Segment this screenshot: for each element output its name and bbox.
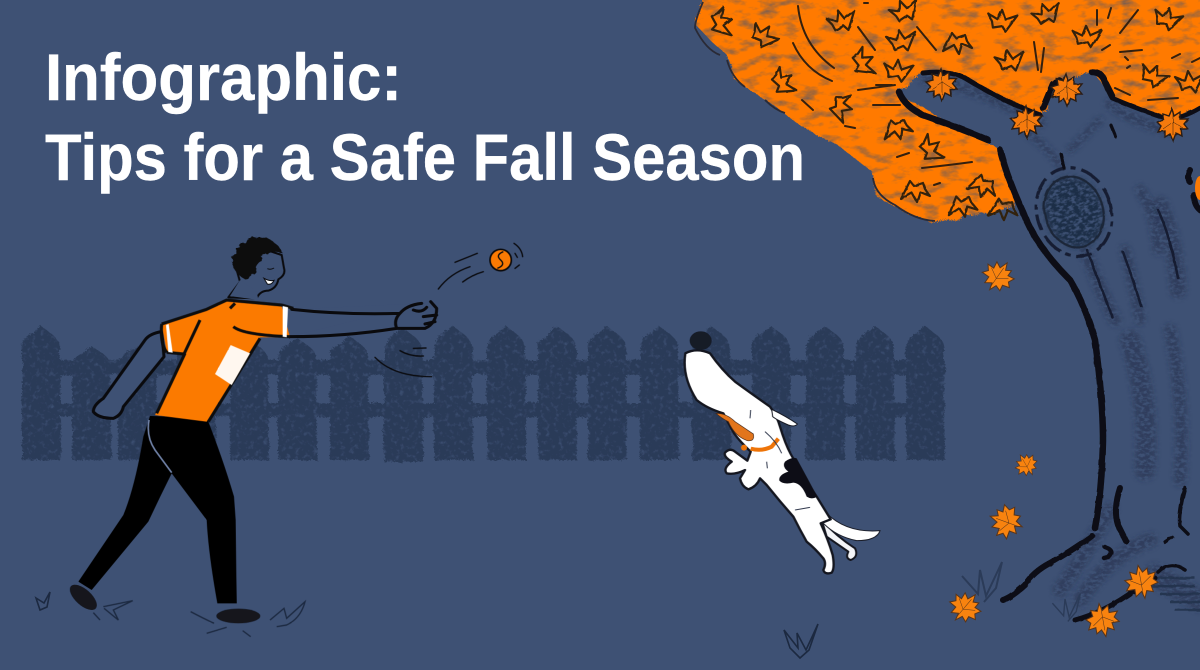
motion lines [375, 243, 523, 377]
hanging leaves on branches [926, 69, 1188, 141]
dog tail [823, 513, 880, 541]
leaf 2 [1011, 449, 1042, 480]
hair [232, 237, 283, 280]
pants [78, 416, 237, 603]
man throwing ball [66, 237, 523, 637]
leaf 6 [1084, 601, 1121, 639]
upper ear [772, 409, 797, 426]
leaf 5 [1123, 563, 1160, 601]
dog details [750, 410, 810, 510]
back leg [822, 520, 856, 560]
dog body [685, 350, 834, 573]
mouth lobe [716, 413, 754, 441]
sleeve cuffs [166, 306, 288, 353]
title [45, 40, 805, 194]
knot [1025, 158, 1123, 266]
pocket [215, 345, 250, 385]
dog collar [741, 439, 778, 451]
title: Tips for a Safe Fall Season [45, 120, 805, 194]
tennis ball [490, 249, 511, 271]
canopy leaf marks [709, 0, 1200, 221]
grass tufts [36, 562, 1080, 658]
head and neck [228, 237, 284, 300]
extended arm [290, 302, 437, 337]
title: Infographic: [45, 40, 402, 114]
shoes [66, 580, 260, 623]
shirt [155, 300, 293, 422]
leaf 4 [943, 585, 988, 630]
nose [690, 331, 712, 350]
back arm [93, 332, 164, 418]
falling maple leaves [943, 254, 1160, 639]
smile [264, 278, 274, 284]
ground scuffs [93, 601, 305, 637]
knothole orange patch [1195, 176, 1200, 200]
black spot [779, 458, 817, 498]
tree canopy [695, 0, 1200, 222]
trunk outline [899, 72, 1200, 620]
picket fence [22, 326, 945, 466]
canopy strokes [793, 3, 1200, 185]
jumping dog [685, 331, 880, 573]
trunk hatch marks [1150, 578, 1200, 610]
leaf 1 [977, 254, 1020, 298]
tree trunk [899, 69, 1200, 620]
trunk shading [925, 80, 1200, 600]
leaf 3 [985, 500, 1028, 543]
